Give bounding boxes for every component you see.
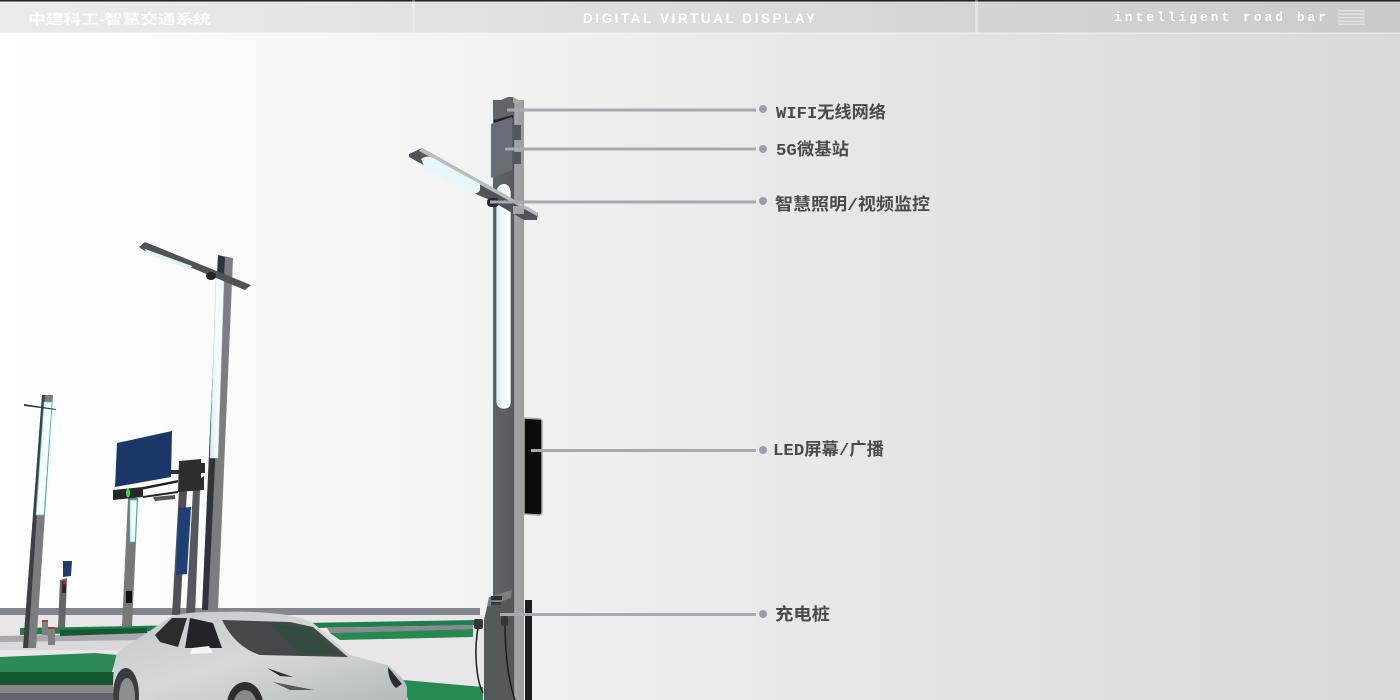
far street light left: [23, 395, 56, 648]
wheels: [113, 668, 139, 700]
street scene ground: [0, 608, 490, 700]
WIFI module: [494, 97, 513, 120]
blue billboard: [115, 431, 172, 487]
callout: LED: [531, 440, 884, 461]
callout: LED: LED屏幕/广播: [773, 440, 884, 461]
pole body: [493, 100, 524, 700]
small traffic signal pole: [42, 561, 72, 645]
charging pile: [474, 590, 532, 700]
LED screen: [524, 418, 542, 515]
middle pole with sign gantry: [113, 431, 205, 626]
mid street light: [139, 242, 251, 610]
5G micro base station: [491, 117, 512, 178]
callout: WIFI: [507, 102, 886, 124]
header title center: DIGITAL VIRTUAL DISPLAY: [583, 11, 815, 26]
callout: WIFI: WIFI无线网络: [776, 102, 886, 124]
callout: 5G: 5G微基站: [776, 140, 849, 161]
twin posts: [172, 490, 187, 615]
header bar: [0, 0, 1400, 34]
callout: lighting and video: [490, 194, 930, 216]
callout: charging: [500, 604, 830, 626]
header title right: intelligent road bar: [1114, 10, 1326, 25]
car: [113, 612, 407, 700]
callout: charging: 充电桩: [775, 604, 830, 626]
lamp arm: [409, 148, 538, 220]
callout: lighting and video: 智慧照明/视频监控: [775, 194, 930, 216]
traffic light arm: [113, 487, 143, 500]
callout: 5G: [505, 140, 849, 161]
light strip: [496, 184, 511, 409]
main smart pole: [409, 97, 542, 700]
header title left: 中建科工-智慧交通系统: [28, 11, 212, 27]
icon: menu lines: [1338, 10, 1365, 25]
